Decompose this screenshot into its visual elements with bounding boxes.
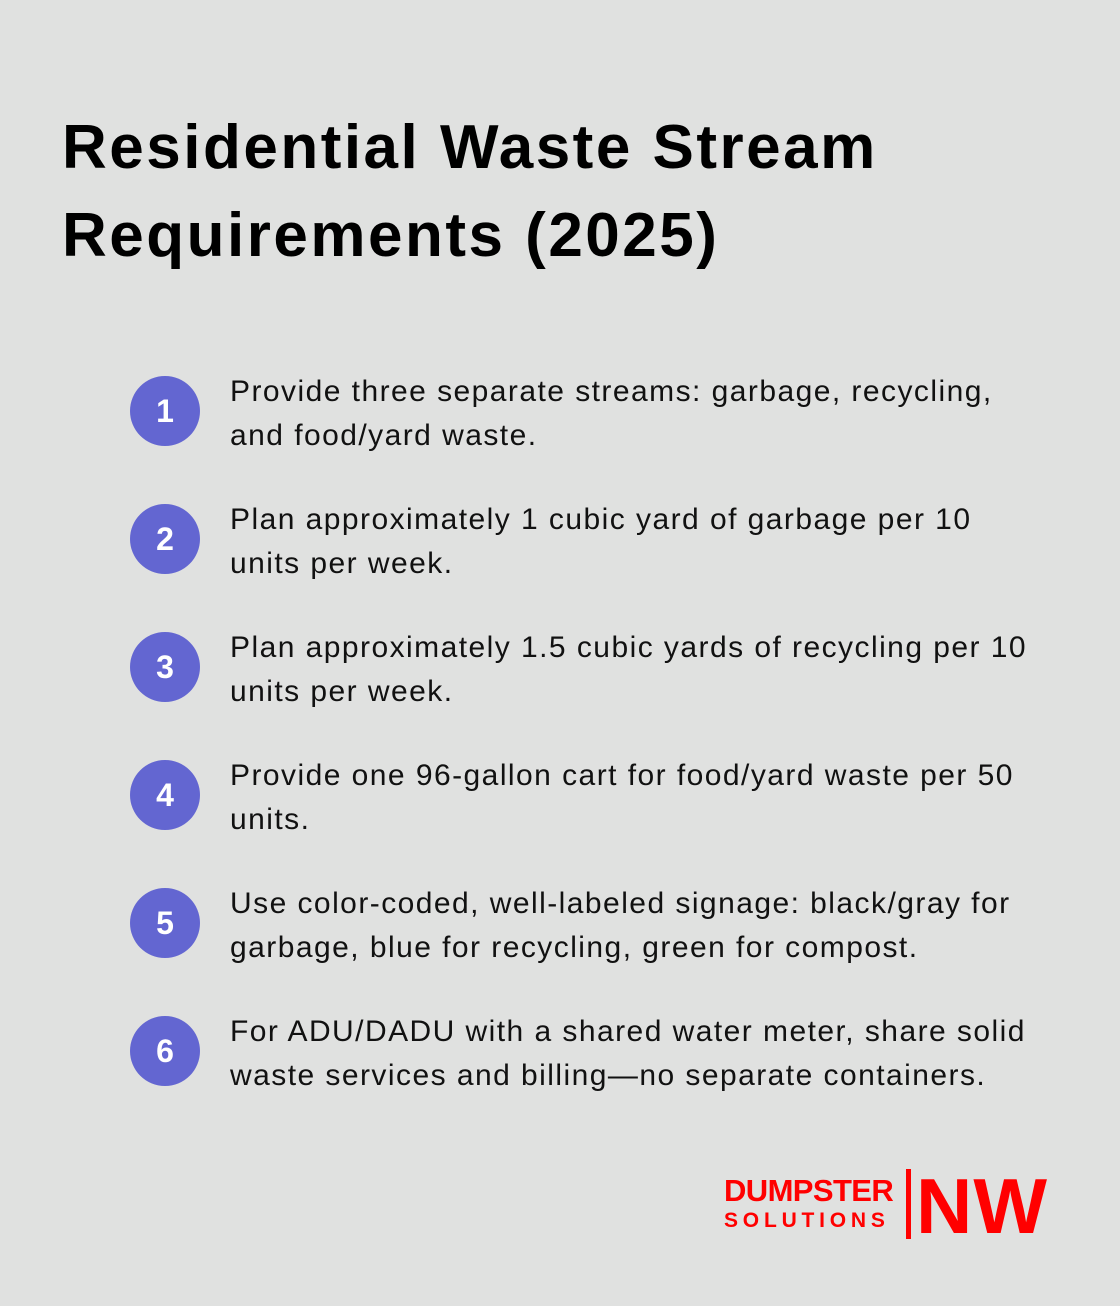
item 4: Provide one 96-gallon cart for food/yard waste per 50 — [230, 759, 1014, 792]
item 3: units per week. — [230, 675, 454, 708]
item 5: Use color-coded, well-labeled signage: black/gray for — [230, 887, 1011, 920]
item 5: 5 — [156, 905, 174, 941]
logo: SOLUTIONS — [724, 1209, 890, 1232]
item 1: 1 — [156, 393, 174, 429]
title: Residential Waste Stream — [62, 113, 878, 182]
item 1: and food/yard waste. — [230, 419, 538, 452]
item 5: garbage, blue for recycling, green for compost. — [230, 931, 918, 964]
item 2: units per week. — [230, 547, 454, 580]
item 6: For ADU/DADU with a shared water meter, share solid — [230, 1015, 1026, 1048]
logo: DUMPSTER — [724, 1173, 893, 1208]
item 2 — [130, 503, 971, 580]
item 3 — [130, 631, 1027, 708]
item 6 — [130, 1015, 1026, 1092]
item 1 — [130, 375, 993, 452]
item 4 — [130, 759, 1014, 836]
logo: NW — [916, 1162, 1048, 1250]
item 2: Plan approximately 1 cubic yard of garbage per 10 — [230, 503, 971, 536]
item 4: units. — [230, 803, 310, 836]
item 5 — [130, 887, 1011, 964]
logo — [724, 1162, 1048, 1250]
item 4: 4 — [156, 777, 174, 813]
item 6: waste services and billing—no separate containers. — [230, 1059, 986, 1092]
item 3: 3 — [156, 649, 174, 685]
title: Requirements (2025) — [62, 201, 719, 270]
item 1: Provide three separate streams: garbage, recycling, — [230, 375, 993, 408]
title — [62, 113, 878, 270]
item 6: 6 — [156, 1033, 174, 1069]
item 2: 2 — [156, 521, 174, 557]
item 3: Plan approximately 1.5 cubic yards of recycling per 10 — [230, 631, 1027, 664]
